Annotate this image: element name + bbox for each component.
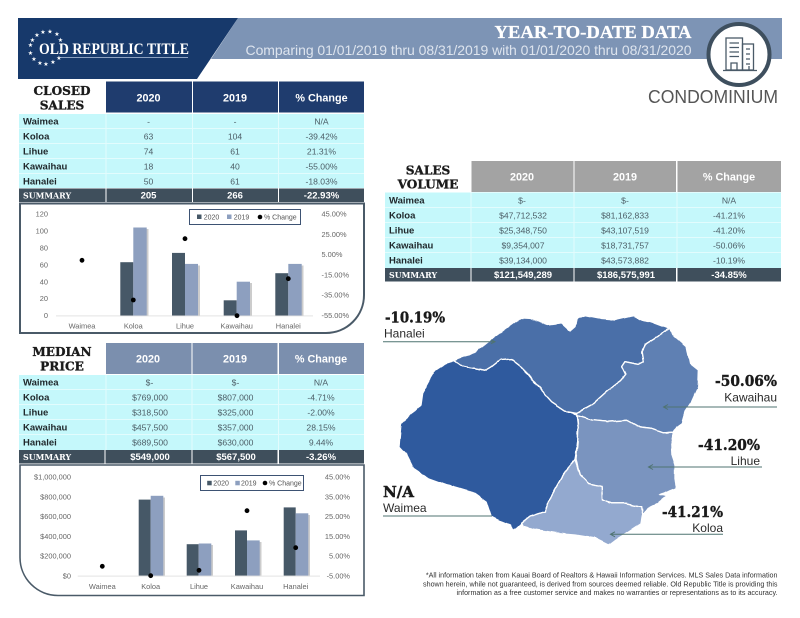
table body rows: -41.20%	[713, 226, 745, 236]
table body rows	[19, 375, 364, 450]
summary row: 266	[227, 190, 243, 202]
left axis labels: $800,000	[40, 492, 71, 501]
right axis labels: -35.00%	[322, 290, 349, 300]
left axis labels	[36, 210, 48, 320]
callout: Waimea: Waimea	[383, 501, 427, 515]
summary row	[385, 268, 781, 282]
icon: condominium building	[708, 24, 770, 85]
map region: Kawaihau	[577, 328, 698, 432]
footnote disclaimer: shown herein, while not guaranteed, is derived from sources deemed reliable. Old Republic Title is providing this	[423, 580, 778, 588]
table body rows: -10.19%	[713, 256, 745, 266]
table header row: % Change	[295, 354, 347, 366]
right axis labels: 25.00%	[325, 512, 350, 521]
heading: closed sales: CLOSED	[33, 84, 91, 98]
right axis labels: 25.00%	[322, 230, 347, 239]
table body rows: 28.15%	[306, 422, 336, 432]
heading: sales volume: VOLUME	[397, 178, 458, 192]
logo panel	[18, 18, 238, 79]
callout: Hanalei: -10.19%	[385, 310, 445, 326]
table header row: 2020	[136, 354, 160, 366]
table header row: 2019	[223, 354, 247, 366]
arrow: Lihue	[648, 464, 762, 470]
arrow: Kawaihau	[664, 404, 777, 410]
left axis labels: $0	[63, 572, 71, 580]
callout: Koloa: Koloa	[692, 521, 723, 535]
table body rows: Kawaihau	[23, 162, 68, 172]
table body rows: Koloa	[23, 132, 50, 142]
bars	[78, 496, 320, 576]
logo stars: ★	[28, 42, 33, 49]
table body rows: Hanalei	[23, 176, 57, 188]
table body rows: Waimea	[23, 378, 59, 388]
map region: Hanalei	[454, 316, 668, 413]
table body rows: $318,500	[132, 408, 168, 418]
category labels: Kawaihau	[231, 582, 263, 591]
table body rows: Lihue	[23, 408, 48, 418]
table body rows: 18	[144, 162, 153, 172]
footnote disclaimer: information as a free customer service and makes no warranties or representations as to its accuracy.	[457, 589, 778, 597]
table body rows: 63	[144, 132, 153, 142]
table body rows: $43,107,519	[601, 226, 649, 236]
left axis labels: $1,000,000	[34, 472, 71, 482]
map region: Koloa	[522, 460, 643, 545]
table body rows: Koloa	[389, 210, 416, 222]
legend: 2020	[213, 481, 229, 488]
callout: Kawaihau	[664, 373, 777, 410]
category labels: Kawaihau	[220, 322, 253, 330]
table body rows: $807,000	[218, 392, 254, 402]
table body rows: $9,354,007	[501, 240, 545, 250]
left axis labels: $200,000	[40, 552, 71, 561]
table header row: 2020	[136, 92, 161, 104]
left axis labels: 120	[36, 210, 48, 218]
table body rows: $39,134,000	[499, 256, 547, 266]
logo stars: ★	[40, 29, 46, 36]
callout: Lihue: -41.20%	[698, 437, 760, 454]
table: median price	[19, 343, 364, 464]
category labels: Lihue	[176, 322, 194, 330]
left axis labels: 60	[40, 260, 48, 270]
right axis labels: -55.00%	[322, 311, 349, 320]
table body rows: $25,348,750	[499, 226, 547, 236]
table body rows: 21.31%	[307, 146, 336, 156]
summary row	[19, 188, 364, 202]
arrow: Hanalei	[383, 340, 495, 344]
table header row: 2019	[613, 172, 637, 184]
arrow: Koloa	[610, 532, 723, 537]
category labels	[89, 582, 309, 591]
logo stars	[28, 28, 63, 68]
right axis labels: 35.00%	[325, 492, 350, 501]
logo stars: ★	[47, 28, 53, 36]
bar chart: closed sales	[20, 204, 364, 333]
left axis labels: $600,000	[40, 512, 71, 521]
table body rows: -39.42%	[305, 132, 338, 142]
summary row: SUMMARY	[389, 271, 437, 280]
table body rows: 104	[228, 132, 242, 142]
table body rows: $47,712,532	[499, 210, 547, 220]
table body rows: -	[147, 116, 150, 126]
table body rows: Hanalei	[23, 438, 57, 448]
callout: Lihue: Lihue	[731, 454, 760, 468]
logo stars: ★	[30, 37, 35, 44]
footnote disclaimer	[423, 572, 778, 597]
legend: 2019	[241, 481, 257, 488]
bar chart: median price	[20, 465, 364, 596]
legend: 2019	[234, 214, 249, 222]
heading: closed sales	[33, 84, 91, 112]
heading: closed sales: SALES	[40, 98, 84, 112]
summary row: $549,000	[130, 452, 170, 463]
category label: condominium: CONDOMINIUM	[648, 87, 778, 107]
category labels: Waimea	[89, 582, 117, 591]
callout: Hanalei	[383, 310, 495, 344]
heading: median price: PRICE	[40, 360, 84, 374]
callout: Waimea	[383, 484, 492, 516]
table body rows: $325,000	[218, 408, 254, 418]
table body rows: $769,000	[132, 392, 168, 402]
map of Kauai districts	[399, 316, 698, 545]
table body rows: $-	[232, 378, 239, 388]
table: sales volume	[385, 161, 781, 282]
summary row: $121,549,289	[494, 270, 552, 281]
logo wordmark: OLD REPUBLIC TITLE	[39, 41, 189, 58]
logo stars: ★	[56, 55, 62, 62]
summary row: $186,575,991	[597, 270, 656, 281]
callout: Lihue	[648, 437, 762, 470]
heading: median price: MEDIAN	[32, 345, 92, 359]
logo stars: ★	[34, 32, 40, 39]
table header row	[106, 82, 364, 112]
table body rows: -	[234, 116, 237, 126]
table body rows: Koloa	[23, 392, 50, 404]
table header row: 2019	[223, 92, 247, 104]
right axis labels: 45.00%	[322, 210, 347, 218]
category labels: Hanalei	[276, 322, 301, 330]
arrow: Waimea	[383, 515, 492, 517]
table body rows: N/A	[314, 116, 329, 126]
left axis labels	[34, 472, 71, 580]
table body rows: 61	[230, 146, 240, 156]
table body rows: -18.03%	[305, 176, 338, 186]
summary row: SUMMARY	[23, 192, 71, 200]
table body rows: $-	[621, 196, 629, 206]
summary row: -22.93%	[304, 190, 340, 202]
table body rows: $630,000	[218, 438, 254, 448]
summary row: 205	[141, 190, 157, 202]
left axis labels: 0	[44, 311, 48, 320]
percent change markers	[100, 508, 298, 578]
legend	[200, 476, 304, 490]
logo stars: ★	[28, 50, 33, 57]
header banner	[18, 18, 782, 79]
table body rows: N/A	[722, 196, 736, 206]
heading: sales volume: SALES	[406, 163, 450, 177]
category labels: Waimea	[69, 322, 96, 330]
category labels: Koloa	[141, 582, 161, 591]
category labels: Koloa	[124, 322, 144, 330]
callout: Kawaihau: Kawaihau	[724, 390, 777, 404]
category labels: Lihue	[190, 582, 208, 591]
table body rows: $357,000	[218, 422, 254, 432]
callout: Hanalei: Hanalei	[384, 326, 425, 340]
heading: median price	[32, 345, 92, 374]
table body rows: $43,573,882	[601, 256, 649, 266]
logo stars: ★	[31, 56, 37, 63]
right axis labels: 5.00%	[329, 552, 350, 561]
category labels	[69, 322, 301, 330]
legend: % Change	[269, 481, 302, 488]
legend	[190, 210, 300, 224]
table body rows: 50	[144, 176, 153, 186]
callout: Waimea: N/A	[383, 484, 415, 501]
callout: Koloa: -41.21%	[662, 504, 723, 521]
table body rows: Kawaihau	[23, 422, 68, 434]
summary row: $567,500	[216, 452, 256, 463]
legend: 2020	[204, 214, 219, 222]
table body rows: Hanalei	[389, 256, 423, 266]
right axis labels: 45.00%	[325, 472, 350, 482]
table header row	[472, 161, 781, 192]
table body rows: $81,162,833	[601, 210, 649, 220]
summary row: -3.26%	[306, 452, 337, 463]
table body rows: Lihue	[389, 226, 414, 236]
table body rows: 61	[230, 176, 240, 186]
table header row	[106, 343, 364, 374]
right axis labels	[325, 472, 350, 580]
table body rows: $457,500	[132, 422, 168, 432]
callout: Kawaihau: -50.06%	[715, 373, 777, 390]
table body rows: $-	[518, 196, 526, 206]
table body rows	[19, 114, 364, 188]
left axis labels: 20	[40, 294, 48, 303]
logo stars: ★	[58, 37, 63, 44]
map region: Lihue	[576, 416, 677, 515]
table body rows	[385, 192, 781, 268]
table body rows: 9.44%	[309, 438, 334, 448]
table body rows: $18,731,757	[601, 240, 649, 250]
table body rows: -2.00%	[307, 408, 335, 418]
logo stars: ★	[54, 31, 60, 38]
table: closed sales	[19, 82, 364, 202]
table header row: % Change	[703, 172, 755, 184]
subtitle: Comparing 01/01/2019 thru 08/31/2019 with 01/01/2020 thru 08/31/2020	[246, 42, 692, 58]
table body rows: -50.06%	[713, 240, 745, 250]
right axis labels: -15.00%	[322, 270, 349, 280]
logo stars: ★	[50, 59, 56, 66]
table body rows: Waimea	[23, 116, 59, 128]
right axis labels	[322, 210, 349, 320]
footnote disclaimer: *All information taken from Kauai Board of Realtors & Hawaii Information Services. MLS Sales Data information	[426, 572, 778, 580]
percent change markers	[80, 236, 291, 318]
right axis labels: -5.00%	[327, 572, 350, 580]
table header row: % Change	[295, 92, 348, 104]
legend: % Change	[264, 214, 297, 222]
left axis labels: 100	[36, 226, 48, 236]
bars	[56, 228, 313, 316]
table body rows: -4.71%	[307, 392, 335, 402]
left axis labels: $400,000	[40, 532, 71, 541]
summary row: -34.85%	[711, 270, 747, 281]
table body rows: Kawaihau	[389, 240, 434, 252]
right axis labels: 15.00%	[325, 532, 350, 541]
heading: sales volume	[397, 163, 458, 192]
summary row: SUMMARY	[23, 453, 71, 462]
table body rows: Waimea	[389, 196, 425, 206]
category labels: Hanalei	[283, 582, 309, 591]
table body rows: N/A	[314, 378, 328, 388]
table body rows: -55.00%	[305, 162, 338, 172]
title: YEAR-TO-DATE DATA	[494, 22, 692, 42]
table body rows: 74	[144, 146, 153, 156]
summary row	[19, 450, 364, 464]
table body rows: $-	[146, 378, 153, 388]
left axis labels: 40	[40, 278, 48, 286]
left axis labels: 80	[40, 244, 48, 252]
table header row: 2020	[510, 172, 534, 184]
table body rows: Lihue	[23, 146, 48, 158]
logo stars: ★	[43, 61, 49, 68]
table body rows: $689,500	[132, 438, 168, 448]
callout: Koloa	[610, 504, 723, 537]
table body rows: -41.21%	[713, 210, 745, 220]
table body rows: 40	[230, 162, 240, 172]
right axis labels: 5.00%	[322, 250, 343, 259]
logo stars: ★	[37, 60, 43, 67]
map region: Waimea	[399, 359, 578, 531]
